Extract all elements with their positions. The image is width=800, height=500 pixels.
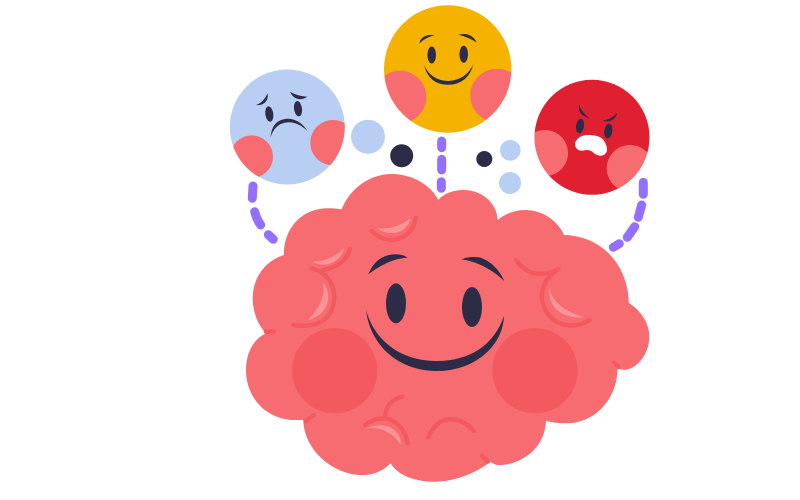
sad blue face xyxy=(230,70,356,184)
wrinkles xyxy=(266,218,618,462)
illustration: happy brain with three emotion faces xyxy=(230,5,650,482)
decorative dots xyxy=(351,120,521,194)
dashed connector: happy face to brain xyxy=(437,141,446,188)
brain silhouette xyxy=(246,174,649,482)
happy yellow face xyxy=(384,5,512,133)
wrinkle highlights xyxy=(308,218,585,445)
cheeks xyxy=(292,328,377,413)
brain xyxy=(246,174,649,482)
dashed connector: angry face to brain xyxy=(613,182,643,247)
dashed connector: sad face to brain xyxy=(252,186,273,239)
angry red face xyxy=(534,80,650,195)
brain eyes xyxy=(386,283,406,323)
brain eyebrows xyxy=(368,254,408,274)
brain smile xyxy=(366,310,504,371)
